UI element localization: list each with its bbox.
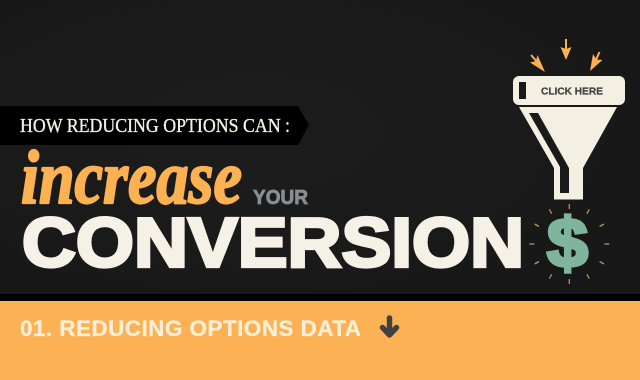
banner: how reducing options can: HOW REDUCING OPTIONS CAN : bbox=[20, 115, 290, 137]
heading word: your: YOUR bbox=[253, 187, 309, 209]
funnel body bbox=[519, 107, 617, 200]
arrow: left bbox=[530, 55, 545, 72]
icon: funnel with click here button bbox=[513, 76, 625, 200]
heading word: increase: increase bbox=[21, 136, 242, 220]
rays bbox=[529, 204, 609, 284]
arrow: right bbox=[590, 52, 602, 71]
icon: three arrows pointing into funnel bbox=[530, 39, 602, 72]
icon: down arrow bbox=[382, 318, 396, 335]
arrow: center bbox=[560, 39, 572, 60]
funnel inner highlight bbox=[529, 113, 569, 193]
button: click here: CLICK HERE bbox=[541, 86, 603, 97]
icon: dollar sign with rays bbox=[529, 204, 609, 284]
banner: how reducing options can bbox=[0, 106, 309, 145]
section heading: 01. REDUCING OPTIONS DATA bbox=[20, 316, 361, 341]
heading word: conversion: CONVERSION bbox=[22, 204, 524, 282]
panel: section band bbox=[0, 301, 640, 380]
dollar glyph: $ bbox=[547, 204, 588, 282]
footer band edge bbox=[0, 294, 640, 301]
